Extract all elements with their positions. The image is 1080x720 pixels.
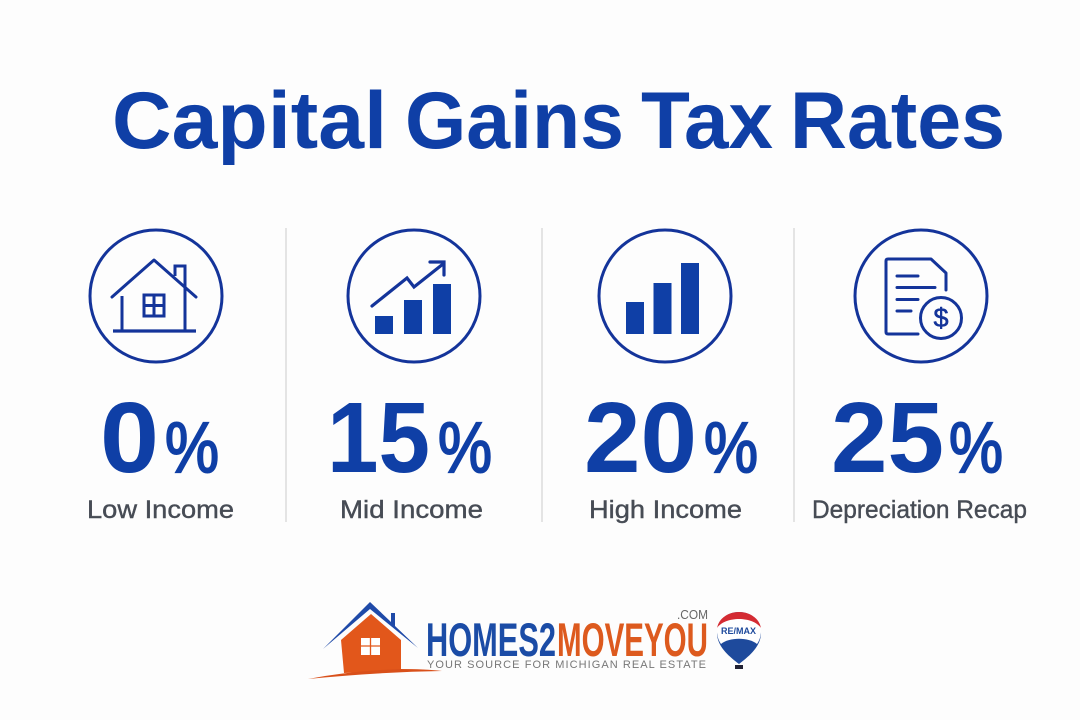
icon: rising bar chart	[348, 230, 480, 362]
label: mid income: Mid Income	[340, 496, 483, 524]
icon: document with dollar: $	[933, 303, 949, 333]
title: Capital	[112, 76, 387, 166]
rate: 0%: 0	[100, 382, 159, 494]
label: high income: High Income	[589, 496, 742, 524]
icon: document with dollar	[855, 230, 987, 362]
rate: 15%: 15	[327, 382, 430, 494]
logo wordmark: HOMES2	[426, 613, 556, 666]
panel: high income: %	[704, 409, 758, 488]
label: low income: Low Income	[87, 496, 234, 524]
panel: mid income	[327, 230, 492, 524]
logo .com: .COM	[677, 607, 708, 622]
icon: re/max balloon: RE/MAX	[721, 626, 756, 636]
panel: depreciation recapture	[812, 230, 1027, 524]
title: Tax	[641, 76, 773, 166]
title: Rates	[790, 76, 1005, 166]
icon: logo house	[308, 602, 442, 679]
panel: mid income: %	[438, 409, 492, 488]
icon: re/max balloon	[717, 612, 761, 669]
panel: high income	[584, 230, 758, 524]
panel: low income	[87, 230, 234, 524]
logo: homes2moveyou	[308, 602, 761, 679]
icon: house	[90, 230, 222, 362]
logo: homes2moveyou: MOVEYOU	[557, 613, 708, 666]
title	[112, 76, 1005, 166]
panel: depreciation recapture: %	[949, 409, 1003, 488]
panel: low income: %	[165, 409, 219, 488]
rate: 25%: 25	[831, 382, 944, 494]
icon: bar chart	[599, 230, 731, 362]
rate: 20%: 20	[584, 382, 697, 494]
title: Gains	[405, 76, 624, 166]
label: depreciation recap: Depreciation Recap	[812, 496, 1027, 524]
logo tagline: YOUR SOURCE FOR MICHIGAN REAL ESTATE	[427, 659, 706, 671]
